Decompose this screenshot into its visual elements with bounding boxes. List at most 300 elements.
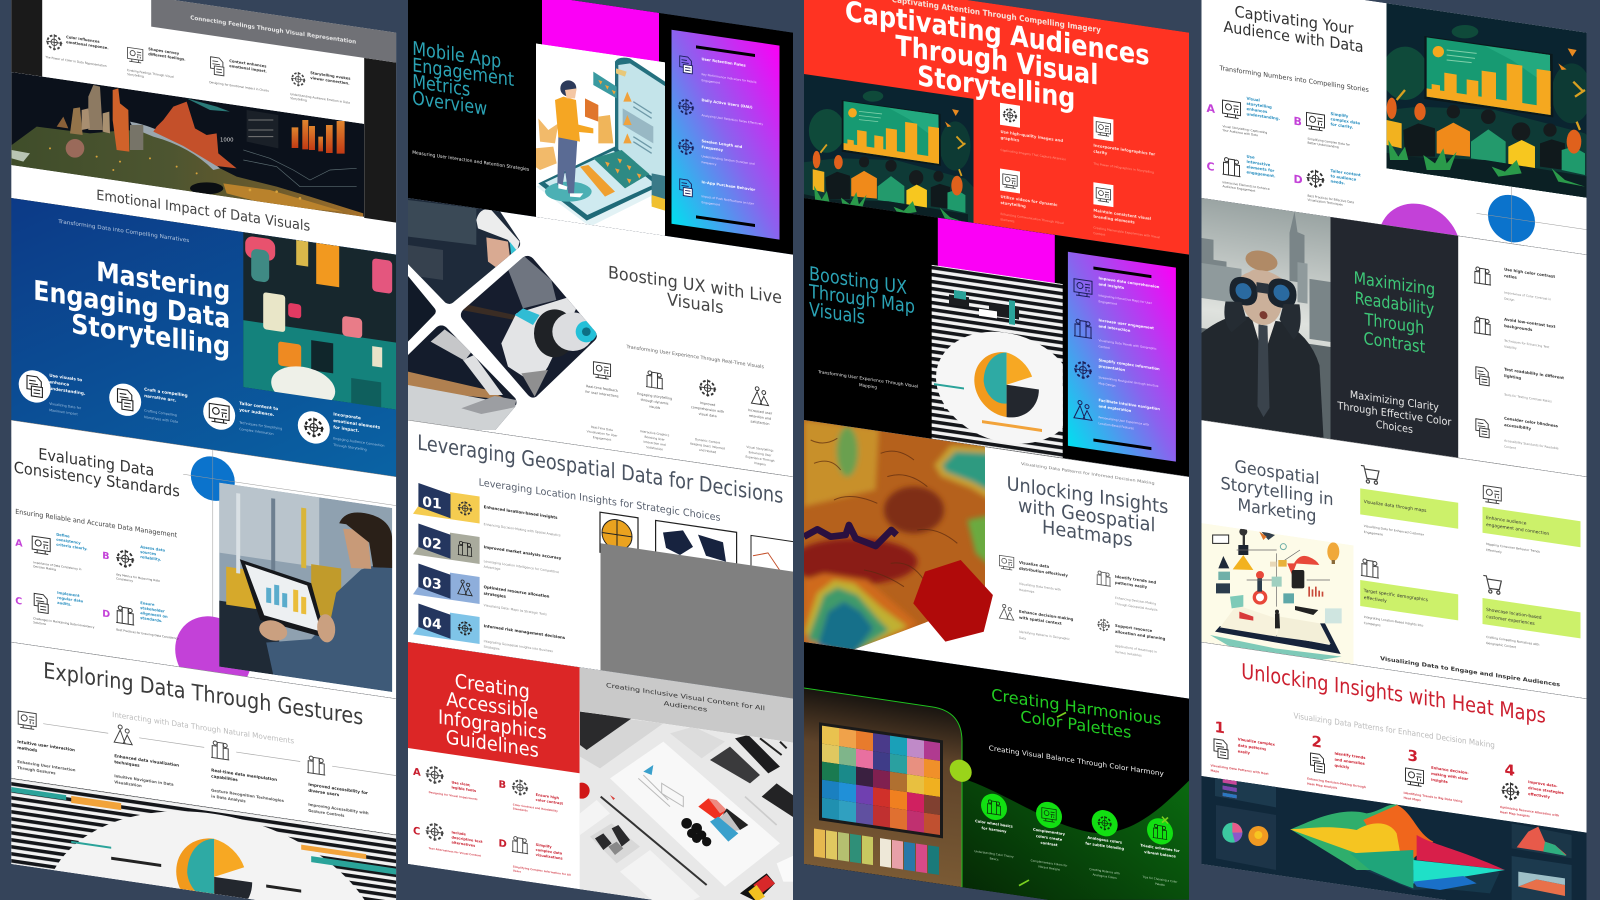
- title: Mobile App: [412, 37, 501, 73]
- item list: heatmap benefits: with spatial context: [1019, 615, 1062, 626]
- item list: heat map benefits: 4: [1504, 761, 1515, 780]
- subtitle: Visualizing Data Patterns for Enhanced Decision Making: [1293, 711, 1495, 750]
- title: Marketing: [1237, 495, 1316, 527]
- item list: accessibility tips: Ensure high: [536, 793, 559, 800]
- item row: colour schemes: Triadic schemes for: [1140, 843, 1180, 853]
- item list: heat map benefits: driven strategies: [1528, 786, 1565, 795]
- item list: consistency steps: regular data: [57, 596, 83, 604]
- accent: purple circle: [1378, 198, 1460, 292]
- item list: consistency steps: Key Metrics for Measuring Data: [116, 572, 160, 583]
- item: emotional elements: Incorporate: [333, 411, 361, 420]
- panel: map benefits list: Personalizing User Experience with: [1098, 415, 1149, 427]
- item list: heat map benefits: Heat Map Insights: [1500, 810, 1530, 818]
- item list: heat map benefits: and anomalies: [1334, 758, 1365, 766]
- item row: live visual benefits: Boosting User: [645, 435, 665, 442]
- item row: colour schemes: Palette: [1155, 882, 1165, 887]
- item list: accessibility tips: alternatives: [451, 840, 475, 848]
- item: target demographics: effectively: [1364, 595, 1387, 604]
- accent: lime circle: [950, 758, 972, 783]
- title: [1224, 1, 1364, 56]
- item list: storytelling tips: [1206, 90, 1361, 209]
- panel: metrics list: Session Length and: [702, 139, 742, 149]
- item list: storytelling tips: Simplifying Complex Data for: [1308, 137, 1350, 147]
- title: [808, 262, 915, 336]
- title: [413, 41, 514, 115]
- item list: consistency steps: stakeholder: [140, 606, 165, 614]
- subtitle: Creating Visual Balance Through Color Harmony: [989, 744, 1164, 778]
- panel: metrics list: Daily Active Users (DAU): [702, 98, 753, 110]
- item: customer experiences: Geographic Context: [1486, 641, 1517, 649]
- panel: Maximizing Readability Through Contrast: [1202, 198, 1586, 477]
- item list: accessibility tips: [413, 763, 571, 881]
- item row: live visual benefits: Real-time feedback: [586, 384, 618, 393]
- item list: storytelling tips: Visual Storytelling: Captivating: [1222, 124, 1267, 135]
- title: Consistency Standards: [14, 458, 180, 501]
- timeline: four gesture points: capabilities: [211, 773, 238, 782]
- panel: Leveraging Geospatial Data for Decisions: [408, 420, 801, 700]
- panel: Boosting UX with Live Visuals: [408, 198, 793, 476]
- header band: connecting feelings: [151, 0, 396, 63]
- item row: live visual benefits: Enhancing User: [749, 450, 772, 458]
- item list: consistency steps: A: [15, 538, 23, 550]
- item list: accessibility tips: Standards: [513, 806, 528, 813]
- item: visualize maps: Visualize data through maps: [1364, 499, 1427, 514]
- item list: consistency steps: reliability.: [140, 555, 162, 562]
- item list: visual tips: graphics: [1000, 135, 1020, 143]
- item list: heatmap benefits: Applications of Heatmaps in: [1115, 644, 1157, 654]
- item: customer experiences: Showcase location-based: [1486, 608, 1542, 621]
- item list: contrast tips: Use high color contrast: [1504, 267, 1555, 279]
- item row: colour schemes: [974, 791, 1180, 889]
- item list: accessibility tips: Include: [452, 830, 466, 837]
- panel: map benefits list: and exploration: [1098, 404, 1132, 413]
- item list: heat map benefits: 2: [1312, 732, 1322, 752]
- title block: Accessible: [446, 688, 538, 724]
- panel: map benefits list: Increase user engagement: [1098, 318, 1154, 330]
- item list: heat map benefits: Maps: [1211, 768, 1219, 774]
- panel: map benefits list: Location-Based Features: [1098, 421, 1134, 431]
- item: tailor content: your audience.: [239, 407, 275, 417]
- item list: consistency steps: Assess data: [140, 545, 165, 553]
- item row: live visual benefits: for user interactions: [585, 390, 619, 398]
- icons: map frames: [600, 512, 801, 583]
- item list: consistency steps: B: [102, 550, 109, 562]
- panel: metrics list: Frequency: [702, 145, 724, 152]
- item 01: [413, 482, 561, 537]
- item 01: 01: [422, 494, 442, 513]
- panel: map benefits list: [1068, 252, 1176, 462]
- item list: accessibility tips: A: [413, 767, 421, 779]
- item list: four emotion points: Shapes convey: [148, 47, 179, 56]
- item list: storytelling tips: Best Practices for Effective Data: [1308, 194, 1354, 204]
- item: emotional elements: emotional elements: [333, 418, 381, 430]
- item list: four emotion points: Context enhances: [229, 59, 266, 69]
- item list: heat map benefits: [1210, 717, 1565, 824]
- image: colourful data city: [243, 231, 396, 421]
- item list: storytelling tips: storytelling: [1246, 101, 1272, 110]
- title: Storytelling: [71, 309, 230, 363]
- item list: storytelling tips: D: [1293, 173, 1303, 187]
- item list: four emotion points: Understanding Audience Emotion in Data: [290, 92, 350, 105]
- item list: contrast tips: [1474, 262, 1564, 457]
- item 04: Integrating Geospatial Insights into Business: [484, 639, 553, 653]
- eyebrow text: Visualizing Data Patterns for Informed Decision Making: [1021, 461, 1155, 486]
- timeline: four gesture points: [17, 710, 396, 826]
- item list: accessibility tips: descriptive text: [451, 835, 483, 844]
- image: man with tablet: [219, 483, 392, 692]
- item row: live visual benefits: Dynamic Content: [695, 437, 720, 445]
- item list: heat map benefits: Heat Maps: [1404, 796, 1421, 802]
- accent: green outline: [804, 688, 962, 887]
- title: Visuals: [667, 290, 724, 318]
- title: Color Palettes: [1020, 707, 1131, 742]
- item: use visuals: understanding.: [49, 386, 86, 396]
- item list: heatmap benefits: Support resource: [1115, 623, 1152, 633]
- item list: contrast tips: Techniques for Enhancing Text: [1504, 338, 1549, 349]
- item list: visual tips: clarity: [1093, 149, 1108, 156]
- title: [845, 0, 1150, 126]
- item list: storytelling tips: to audience: [1330, 173, 1357, 182]
- image: design desk flat lay: [574, 679, 795, 900]
- item list: heatmap benefits: Identify trends and: [1115, 574, 1156, 585]
- item list: storytelling tips: understanding.: [1246, 111, 1281, 121]
- item list: contrast tips: backgrounds: [1504, 323, 1533, 332]
- item list: storytelling tips: Visual: [1246, 96, 1260, 103]
- item: use visuals: [19, 368, 86, 417]
- timeline: four gesture points: techniques: [114, 759, 140, 768]
- item: emotional elements: [298, 411, 384, 452]
- panel: metrics list: User Retention Rates: [702, 57, 747, 68]
- item list: storytelling tips: Visualization Techniques: [1308, 198, 1343, 207]
- item: use visuals: Visualizing Data for: [49, 402, 81, 410]
- title: Contrast: [1364, 329, 1425, 358]
- title: Emotional Impact of Data Visuals: [96, 188, 310, 235]
- image: audience watching chart: [1358, 0, 1600, 313]
- item list: heat map benefits: effectively: [1528, 792, 1550, 799]
- item list: visual tips: Content: [1093, 231, 1106, 237]
- item list: heat map benefits: Optimizing Resource Allocation with: [1500, 805, 1559, 818]
- panel: Boosting UX Through Map Visuals: [804, 198, 1189, 477]
- panel: Mastering Engaging Data Storytelling: [11, 197, 396, 477]
- item row: live visual benefits: Improved: [700, 401, 715, 407]
- item list: visual tips: Use high-quality images and: [1000, 129, 1063, 143]
- title: Mastering: [96, 257, 230, 307]
- subtitle band: Creating Inclusive Visual Content for All: [606, 682, 765, 713]
- item list: storytelling tips: Interactive Elements to Enhance: [1222, 180, 1270, 191]
- panel: Unlocking Insights with Geospatial Heatmaps: [791, 387, 1189, 715]
- item list: visual tips: Maintain consistent visual: [1093, 208, 1151, 221]
- title: Readability: [1355, 289, 1434, 320]
- title: Exploring Data Through Gestures: [43, 658, 363, 731]
- item list: storytelling tips: Better Understanding: [1308, 141, 1339, 149]
- title block: Creating: [455, 669, 530, 703]
- item: use visuals: Use visuals to: [49, 373, 82, 382]
- item list: storytelling tips: elements for: [1246, 164, 1274, 173]
- item: tailor content: Techniques for Simplifying: [239, 421, 282, 431]
- item: narrative arc: Craft a compelling: [144, 387, 188, 398]
- item 03: 03: [422, 575, 442, 593]
- panel: metrics list: Key Performance Indicators for Mobile: [702, 72, 756, 84]
- item 03: Visualizing Data: Maps as Strategic Tools: [484, 603, 547, 616]
- item: customer experiences: [1482, 575, 1580, 659]
- item row: colour schemes: for subtle blending: [1085, 841, 1124, 851]
- timeline: four gesture points: Intuitive user interaction: [17, 739, 75, 752]
- item 03: [413, 563, 550, 617]
- item list: visual tips: Utilize videos for dynamic: [1000, 194, 1057, 207]
- title block: Guidelines: [446, 726, 539, 762]
- item list: accessibility tips: Designing for Visual Impairments: [429, 790, 478, 801]
- accent: purple circle: [175, 616, 250, 676]
- item 04: [413, 603, 566, 661]
- item list: accessibility tips: legible fonts: [451, 785, 476, 793]
- item list: heatmap benefits: Through Geospatial Analysis: [1114, 602, 1158, 612]
- item list: heatmap benefits: [999, 555, 1166, 661]
- item 04: Informed risk management decisions: [484, 623, 566, 640]
- item 02: Improved market analysis accuracy: [484, 544, 562, 561]
- item list: heatmap benefits: Visualizing Data Trends with: [1019, 582, 1061, 592]
- item: target demographics: Campaigns: [1364, 621, 1381, 627]
- item list: contrast tips: ratios: [1504, 273, 1517, 280]
- item list: consistency steps: Best Practices for Ensuring Data Consistency: [116, 627, 179, 641]
- item: customer experiences: Crafting Compelling Narratives with: [1486, 635, 1539, 647]
- image: audience watching chart: [791, 17, 996, 325]
- item list: visual tips: Elements: [1000, 217, 1015, 223]
- item list: consistency steps: Consistency: [116, 576, 133, 583]
- item list: heatmap benefits: Data: [1019, 636, 1026, 641]
- item list: heatmap benefits: Heatmaps: [1019, 588, 1035, 594]
- panel: Evaluating Data Consistency Standards: [11, 420, 396, 720]
- item: use visuals: Maximum Impact: [49, 408, 78, 416]
- item list: visual tips: Captivating Imagery That Capture Attention: [1000, 148, 1066, 162]
- item: visualize maps: [1360, 465, 1458, 548]
- item row: colour schemes: Basics: [990, 856, 999, 862]
- item 01: Enhanced location-based insights: [484, 504, 558, 520]
- item list: contrast tips: accessibility: [1504, 422, 1532, 431]
- item list: four emotion points: The Power of Color in Data Representation: [44, 55, 107, 68]
- item: emotional elements: for impact.: [333, 424, 360, 433]
- item: enhance engagement: [1482, 485, 1580, 566]
- panel: metrics list: Impact of Push Notifications on User: [702, 194, 754, 206]
- item list: heat map benefits: 3: [1407, 746, 1418, 766]
- panel: metrics list: Engagement: [702, 78, 721, 85]
- item list: accessibility tips: C: [413, 826, 420, 838]
- item list: heat map benefits: easily: [1238, 749, 1250, 755]
- item row: colour schemes: Color wheel basics: [975, 819, 1013, 829]
- item list: consistency steps: Ensure: [140, 601, 154, 607]
- item list: storytelling tips: Audience Engagement: [1222, 184, 1256, 193]
- item list: storytelling tips: enhances: [1246, 106, 1268, 114]
- item list: contrast tips: Importance of Color Contrast in: [1504, 290, 1551, 301]
- item list: contrast tips: lighting: [1504, 373, 1521, 380]
- item list: heat map benefits: Identify trends: [1334, 752, 1365, 760]
- item: enhance engagement: Effectively: [1486, 548, 1502, 554]
- item: tailor content: Complex Information: [239, 427, 274, 436]
- item list: four emotion points: Storytelling evokes: [310, 71, 350, 81]
- title block: [408, 642, 580, 773]
- panel: Captivating Audiences Through Visual Storytelling: [791, 0, 1189, 354]
- item list: four emotion points: Evoking Feelings Through Visual: [127, 68, 174, 79]
- item list: contrast tips: Avoid low-contrast text: [1504, 317, 1555, 329]
- item row: live visual benefits: Keeping Users Informed: [690, 442, 725, 451]
- item row: colour schemes: Analogous Colors: [1093, 872, 1117, 880]
- item list: consistency steps: [15, 533, 179, 640]
- item list: consistency steps: Solutions: [33, 620, 47, 626]
- item row: live visual benefits: Increased user: [748, 408, 772, 416]
- accent: lime squiggles: [1019, 706, 1168, 900]
- item list: contrast tips: Accessibility Standards for Readable: [1504, 438, 1558, 450]
- title: Through: [1364, 310, 1424, 339]
- item list: visual tips: Creating Memorable Experiences with Visual: [1093, 226, 1160, 239]
- item row: live visual benefits: and Hooked: [699, 448, 716, 454]
- item list: storytelling tips: C: [1206, 160, 1215, 174]
- title: Maximizing: [1354, 268, 1435, 300]
- item list: heatmap benefits: Visualize data: [1019, 560, 1049, 569]
- item row: live visual benefits: comprehension with: [691, 405, 724, 414]
- title: with Geospatial: [1018, 494, 1155, 537]
- item list: consistency steps: Decision Making: [33, 564, 56, 572]
- item list: heat map benefits: insights: [1431, 778, 1448, 784]
- item list: heat map benefits: Enhancing Decision-Making through: [1307, 777, 1366, 789]
- timeline: four gesture points: Gesture Recognition Technologies: [211, 787, 284, 803]
- title: Overview: [412, 86, 487, 120]
- panel: metrics list: Engagement: [702, 200, 721, 207]
- item list: consistency steps: consistency: [56, 538, 81, 545]
- item list: consistency steps: Challenges in Maintaining Data Consistency: [33, 616, 94, 629]
- item row: live visual benefits: through dynamic: [641, 398, 669, 406]
- item list: heatmap benefits: distribution effectively: [1019, 566, 1068, 578]
- item list: storytelling tips: Simplify: [1330, 111, 1348, 119]
- panel: Captivating Your Audience with Data: [1202, 0, 1600, 316]
- timeline: four gesture points: diverse users: [308, 788, 340, 797]
- item list: accessibility tips: Simplify: [536, 843, 552, 849]
- item list: storytelling tips: needs.: [1330, 178, 1346, 186]
- title: [1220, 455, 1334, 529]
- title: [14, 448, 180, 496]
- panel: metrics list: Analyzing User Retention Rates Effectively: [702, 113, 763, 126]
- image: open book with data objects: [1202, 507, 1354, 684]
- subtitle: Transforming User Experience Through Visual: [817, 369, 918, 389]
- item list: contrast tips: Content: [1504, 444, 1517, 450]
- item list: accessibility tips: visualizations: [536, 853, 563, 861]
- item list: consistency steps: standards.: [140, 616, 163, 623]
- item 03: strategies: [484, 591, 507, 599]
- item list: visual tips: Incorporate infographics for: [1093, 143, 1155, 157]
- timeline: four gesture points: in Data Analysis: [211, 793, 246, 804]
- panel: metrics list: [672, 30, 780, 240]
- timeline: four gesture points: Improved accessibility for: [308, 782, 368, 795]
- panel: map benefits list: presentation: [1098, 364, 1126, 372]
- item list: consistency steps: sources: [140, 550, 157, 556]
- timeline: four gesture points: Real-time data manipulation: [211, 767, 277, 782]
- item row: live visual benefits: visuals: [649, 404, 661, 410]
- item list: accessibility tips: B: [498, 779, 506, 791]
- item list: four emotion points: Storytelling: [127, 72, 144, 79]
- panel: metrics list: Understanding Session Duration and: [702, 154, 755, 166]
- item row: colour schemes: Tips for Choosing a Color: [1143, 875, 1177, 884]
- item row: live visual benefits: Engagement: [593, 435, 612, 442]
- panel: map benefits list: Integrating Interactive Maps for User: [1098, 293, 1152, 305]
- item list: heat map benefits: Improve data-: [1528, 780, 1557, 788]
- item row: colour schemes: contrast: [1041, 841, 1058, 847]
- title: Through Map: [808, 280, 915, 318]
- title: Heatmaps: [1042, 515, 1133, 552]
- title: Metrics: [412, 70, 470, 101]
- item list: storytelling tips: Use: [1246, 154, 1255, 160]
- item list: accessibility tips: Simplifying Complex Information for All: [513, 865, 571, 877]
- item list: accessibility tips: Users: [513, 868, 521, 874]
- accent: magenta block: [542, 0, 659, 63]
- subtitle: Transforming Data into Compelling Narratives: [57, 219, 189, 244]
- item list: storytelling tips: for clarity.: [1330, 121, 1354, 130]
- timeline: four gesture points: Intuitive Navigation in Data: [114, 773, 174, 787]
- item list: heatmap benefits: allocation and planning: [1115, 629, 1166, 641]
- image: topographic heat map: [791, 387, 991, 686]
- item: enhance engagement: Enhance audience: [1486, 516, 1526, 527]
- timeline: four gesture points: Through Gestures: [17, 765, 56, 776]
- item list: storytelling tips: B: [1293, 115, 1302, 129]
- subtitle: Ensuring Reliable and Accurate Data Management: [15, 508, 177, 539]
- image: dashboard with heat plume: [1197, 705, 1597, 900]
- item 02: Advantage: [484, 565, 500, 571]
- item list: heat map benefits: Identifying Trends in Big Data Using: [1404, 791, 1462, 803]
- panel: Unlocking Insights with Heat Maps: [1197, 641, 1597, 900]
- title block: Infographics: [438, 705, 547, 744]
- accent: blue circle: [1488, 192, 1535, 246]
- item row: colour schemes: colors create: [1036, 834, 1063, 842]
- item row: colour schemes: vibrant balance: [1144, 850, 1176, 859]
- title: Visuals: [809, 298, 865, 329]
- item row: live visual benefits: visual data: [699, 412, 717, 418]
- item 02: 02: [422, 535, 442, 553]
- header band: connecting feelings: Connecting Feelings Through Visual Representation: [190, 15, 356, 46]
- title: [1007, 472, 1168, 557]
- item list: heat map benefits: Enhance decision-: [1431, 766, 1469, 775]
- item row: colour schemes: Analogous colors: [1087, 836, 1122, 845]
- panel: map benefits list: and interaction: [1098, 324, 1131, 333]
- accent: blue circle: [191, 453, 235, 504]
- item list: accessibility tips: color contrast: [536, 798, 563, 806]
- subtitle band: [580, 667, 794, 743]
- title: Unlocking Insights: [1007, 472, 1168, 519]
- panel: map benefits list: Improve data comprehension: [1098, 276, 1159, 289]
- item list: four emotion points: Storytelling: [290, 96, 307, 102]
- item list: storytelling tips: A: [1206, 102, 1215, 116]
- subtitle: Interacting with Data Through Natural Movements: [112, 710, 294, 746]
- item list: storytelling tips: engagement.: [1246, 169, 1276, 179]
- subtitle: Measuring User Interaction and Retention Strategies: [412, 150, 530, 173]
- item list: visual tips: [1000, 103, 1160, 245]
- panel: map benefits list: Streamlining Navigation through Intuitive: [1098, 375, 1158, 388]
- title: Audience with Data: [1223, 18, 1363, 56]
- title: [1354, 268, 1435, 359]
- item row: live visual benefits: [585, 360, 775, 468]
- item list: heatmap benefits: Enhance decision-making: [1019, 609, 1073, 622]
- image: striped dashboard with pie chart: [11, 778, 396, 900]
- item row: live visual benefits: satisfaction: [751, 419, 769, 426]
- item: customer experiences: customer experiences: [1486, 614, 1535, 627]
- background wave: [962, 747, 1189, 900]
- item row: live visual benefits: Interaction and: [644, 440, 666, 447]
- item list: heatmap benefits: Identifying Patterns in Geographic: [1019, 630, 1070, 641]
- item row: colour schemes: Complementary: [1033, 828, 1065, 836]
- item list: four emotion points: emotional impact.: [229, 64, 267, 74]
- item list: four emotion points: emotional response.: [66, 40, 109, 50]
- item: use visuals: enhance: [49, 379, 69, 387]
- item list: visual tips: storytelling: [1000, 200, 1026, 209]
- item list: heatmap benefits: Enhancing Decision-Making: [1115, 596, 1156, 606]
- title: Evaluating Data: [38, 445, 154, 480]
- footer text: Visualizing Data to Engage and Inspire Audiences: [1380, 656, 1561, 689]
